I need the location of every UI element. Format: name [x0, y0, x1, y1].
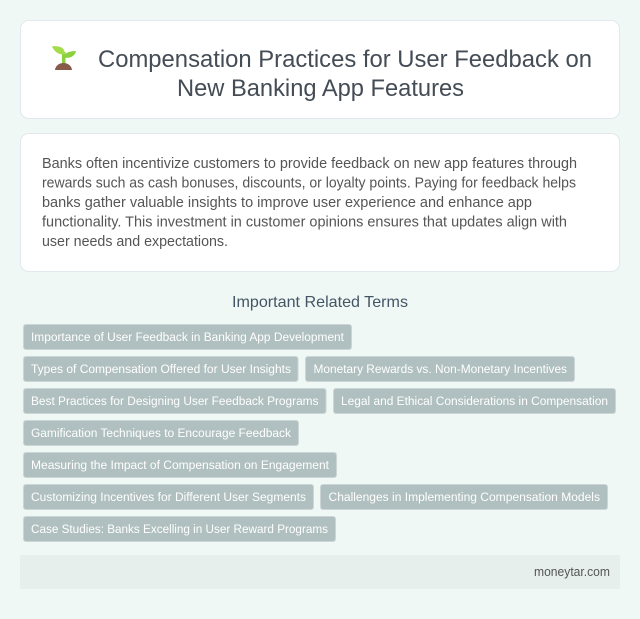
panel: description	[20, 134, 620, 272]
tag: Types of Compensation Offered for User Insights	[31, 362, 291, 376]
tag	[24, 356, 298, 382]
tag: Gamification Techniques to Encourage Feedback	[31, 426, 292, 440]
title: Compensation Practices for User Feedback on	[98, 46, 592, 73]
footer	[20, 555, 620, 589]
title: New Banking App Features	[177, 75, 464, 102]
heading: related terms: Important Related Terms	[232, 294, 408, 311]
text block: description: Banks often incentivize customers to provide feedback on new app features through	[42, 156, 577, 172]
tag	[24, 420, 298, 446]
tag: Customizing Incentives for Different User Segments	[31, 490, 306, 504]
tag	[24, 484, 314, 510]
text block: description: user needs and expectations.	[42, 234, 228, 250]
tag	[320, 484, 608, 510]
tag: Best Practices for Designing User Feedback Programs	[31, 394, 318, 408]
tag	[24, 452, 336, 478]
text block: description: banks gather valuable insights to improve user experience and enhance app	[42, 195, 532, 211]
footer text: moneytar.com	[534, 565, 610, 579]
tag: Legal and Ethical Considerations in Compensation	[341, 394, 608, 408]
tag	[24, 324, 352, 350]
tag: Monetary Rewards vs. Non-Monetary Incentives	[314, 362, 567, 376]
tag	[306, 356, 574, 382]
tag list	[24, 324, 616, 542]
panel: title card	[20, 20, 620, 118]
tag	[334, 388, 616, 414]
tag: Measuring the Impact of Compensation on Engagement	[31, 458, 330, 472]
tag: Importance of User Feedback in Banking App Development	[31, 330, 345, 344]
title	[98, 46, 592, 102]
text block: description	[42, 156, 577, 250]
tag: Challenges in Implementing Compensation Models	[328, 490, 600, 504]
tag: Case Studies: Banks Excelling in User Reward Programs	[31, 522, 328, 536]
tag	[24, 516, 336, 542]
icon: seedling	[52, 46, 76, 70]
text block: description: functionality. This investment in customer opinions ensures that updates align with	[42, 214, 567, 230]
tag	[24, 388, 326, 414]
text block: description: rewards such as cash bonuses, discounts, or loyalty points. Paying for feedback helps	[42, 176, 576, 192]
